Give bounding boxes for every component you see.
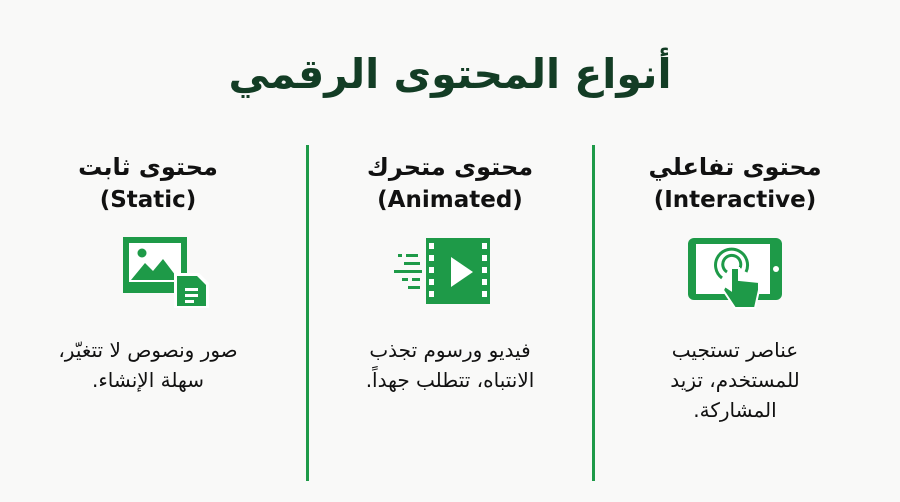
description: animated: فيديو ورسوم تجذب (369, 338, 531, 362)
icon: video film (394, 238, 490, 304)
panel: interactive (648, 153, 822, 422)
description: static: صور ونصوص لا تتغيّر، (58, 338, 238, 362)
description: interactive: للمستخدم، تزيد (670, 368, 800, 392)
description: interactive: عناصر تستجيب (672, 338, 798, 362)
subheading: interactive: (Interactive) (654, 187, 816, 213)
description: static: سهلة الإنشاء. (92, 368, 204, 392)
divider right (592, 145, 595, 481)
subheading: static: (Static) (100, 187, 196, 213)
icon: image and document (123, 237, 206, 306)
heading: animated: محتوى متحرك (367, 153, 533, 181)
subheading: animated: (Animated) (377, 187, 523, 213)
description: interactive (670, 338, 800, 422)
description: static (58, 338, 238, 392)
title: أنواع المحتوى الرقمي (228, 50, 672, 98)
icon: tablet touch (688, 238, 782, 307)
heading: interactive: محتوى تفاعلي (648, 153, 822, 181)
description: animated (366, 338, 534, 392)
panel: static (58, 153, 238, 392)
description: interactive: المشاركة. (693, 398, 777, 422)
divider left (306, 145, 309, 481)
heading: static: محتوى ثابت (78, 153, 218, 181)
panel: animated (366, 153, 534, 392)
description: animated: الانتباه، تتطلب جهداً. (366, 368, 534, 392)
